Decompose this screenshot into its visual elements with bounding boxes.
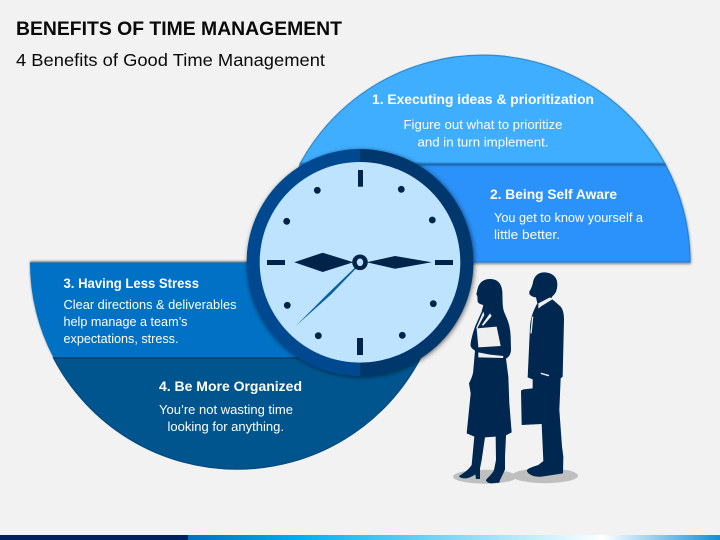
title: BENEFITS OF TIME MANAGEMENT (16, 18, 342, 40)
panel: 4. be more organized (54, 358, 420, 469)
text: executing ideas: and in turn implement. (418, 136, 548, 150)
panel: 3. having less stress (30, 262, 340, 358)
subtitle: 4 Benefits of Good Time Management (16, 50, 325, 70)
hour ticks (267, 170, 453, 355)
silhouette: woman (459, 279, 512, 483)
text: having less stress (64, 298, 237, 346)
minute hand (367, 256, 432, 269)
text: being self aware: You get to know yourself a (494, 211, 643, 225)
text: having less stress: help manage a team’s (64, 315, 188, 329)
panel: 2. being self aware (275, 163, 690, 262)
clock (247, 149, 473, 376)
text: being self aware: little better. (494, 228, 560, 242)
silhouette: man (521, 272, 564, 477)
text: being self aware (494, 211, 643, 242)
minute dots (283, 186, 437, 339)
text: having less stress: Clear directions & deliverables (64, 298, 237, 312)
text: be more organized (159, 403, 293, 434)
heading: executing ideas: 1. Executing ideas & prioritization (372, 91, 594, 107)
hour hand (294, 253, 353, 272)
shadow: man (512, 468, 578, 483)
shadow: woman (453, 470, 517, 484)
text: be more organized: looking for anything. (168, 420, 284, 434)
heading: being self aware: 2. Being Self Aware (490, 186, 617, 202)
heading: be more organized: 4. Be More Organized (159, 378, 302, 394)
text: having less stress: expectations, stress. (64, 332, 178, 346)
clock hub (352, 254, 368, 270)
clock face (260, 162, 460, 363)
text: executing ideas (404, 118, 563, 150)
clock ring (247, 149, 473, 376)
second hand (296, 268, 356, 326)
text: executing ideas: Figure out what to prioritize (404, 118, 563, 132)
footer bar (0, 535, 720, 540)
text: be more organized: You’re not wasting time (159, 403, 293, 417)
heading: having less stress: 3. Having Less Stress (64, 275, 199, 291)
panel: 1. executing ideas (300, 55, 664, 163)
